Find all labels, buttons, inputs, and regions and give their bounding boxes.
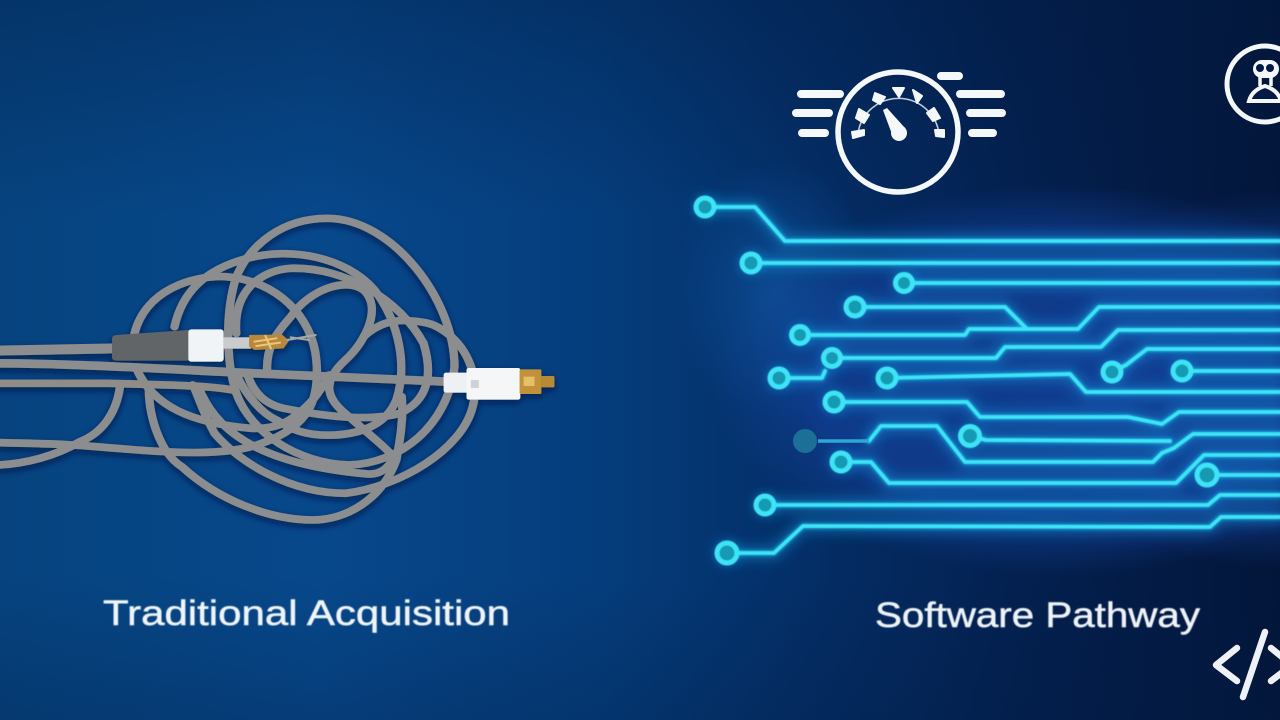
icon: code brackets [1216,632,1280,697]
left connector [112,329,316,362]
heading: traditional acquisition: Traditional Acquisition [103,594,510,633]
dim node and trace [793,429,869,453]
icon: tangled cable with connectors [0,218,554,520]
circuit ambient glow [670,160,1280,580]
panel: traditional acquisition [0,218,554,633]
heading: software pathway: Software Pathway [875,596,1201,635]
panel: software pathway [670,46,1280,697]
icon: speedometer with motion lines [796,72,1002,192]
chart: glowing circuit traces [696,198,1280,563]
right connector [444,368,554,400]
circuit nodes [696,198,1217,563]
icon: person in circle [1227,46,1280,122]
